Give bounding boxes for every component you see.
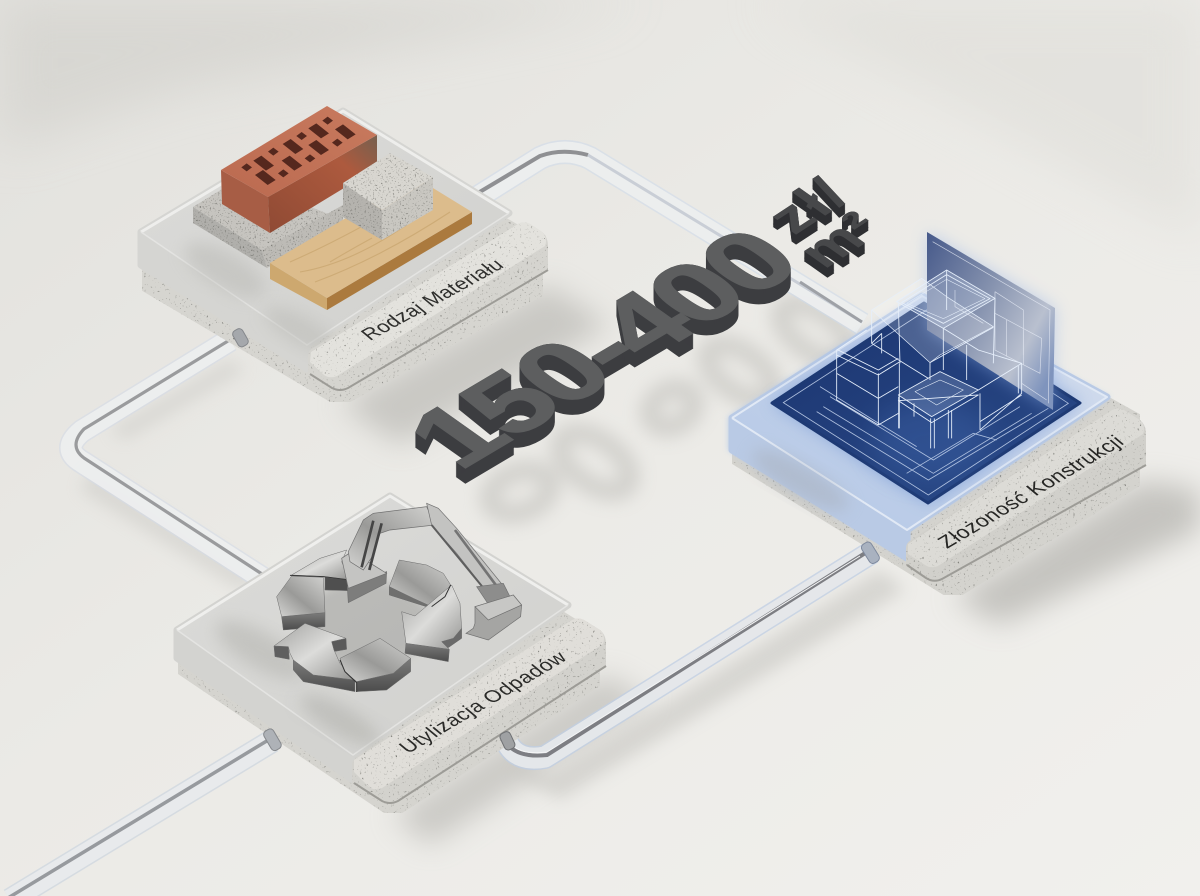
frosted glass slab [177, 496, 568, 780]
label: Rodzaj Materiału: Rodzaj Materiału [357, 256, 509, 344]
unit numerator: zł/ [753, 168, 864, 243]
excavator [342, 503, 522, 640]
floor shadows of panels and number [80, 285, 1200, 845]
panel: material type [141, 106, 548, 402]
label: Utylizacja Odpadów: Utylizacja Odpadów [395, 648, 572, 757]
concrete base [142, 130, 543, 402]
metric: unit zł/m² [753, 168, 895, 277]
pipe: outgoing lower left [8, 739, 272, 896]
panel: waste disposal [177, 496, 606, 813]
panel: construction complexity [728, 232, 1146, 595]
metric: cost range: 150-400 [381, 212, 822, 485]
icon: concrete cube [343, 153, 433, 240]
frosted glass slab [141, 111, 509, 369]
concrete base [732, 300, 1140, 595]
wireframe building [837, 270, 1022, 448]
pipe: material to waste [71, 340, 262, 578]
pipe: material to structure [478, 152, 862, 324]
connector [499, 730, 516, 751]
arrow segment bottom [274, 623, 411, 692]
arrow segment top left [277, 550, 350, 630]
icon: wooden plank [270, 177, 472, 310]
connector [262, 727, 283, 752]
concrete label bar [906, 408, 1146, 581]
icon: recycling arrows [274, 503, 522, 692]
blue glass slab [728, 296, 1110, 560]
label: Złożoność Konstrukcji: Złożoność Konstrukcji [933, 432, 1129, 552]
concrete base [178, 510, 600, 813]
concrete label bar [308, 222, 548, 390]
blueprint tile [772, 303, 1080, 503]
arrow segment right [389, 560, 462, 662]
icon: brick [221, 106, 377, 233]
connecting glass pipes [8, 152, 872, 896]
connector [231, 327, 250, 348]
icon: concrete slab [193, 178, 343, 268]
concrete label bar [352, 618, 606, 803]
unit denominator: m² [785, 203, 895, 277]
blueprint sheet [927, 232, 1055, 410]
pipe: waste to structure [508, 550, 872, 758]
connector [860, 540, 881, 565]
